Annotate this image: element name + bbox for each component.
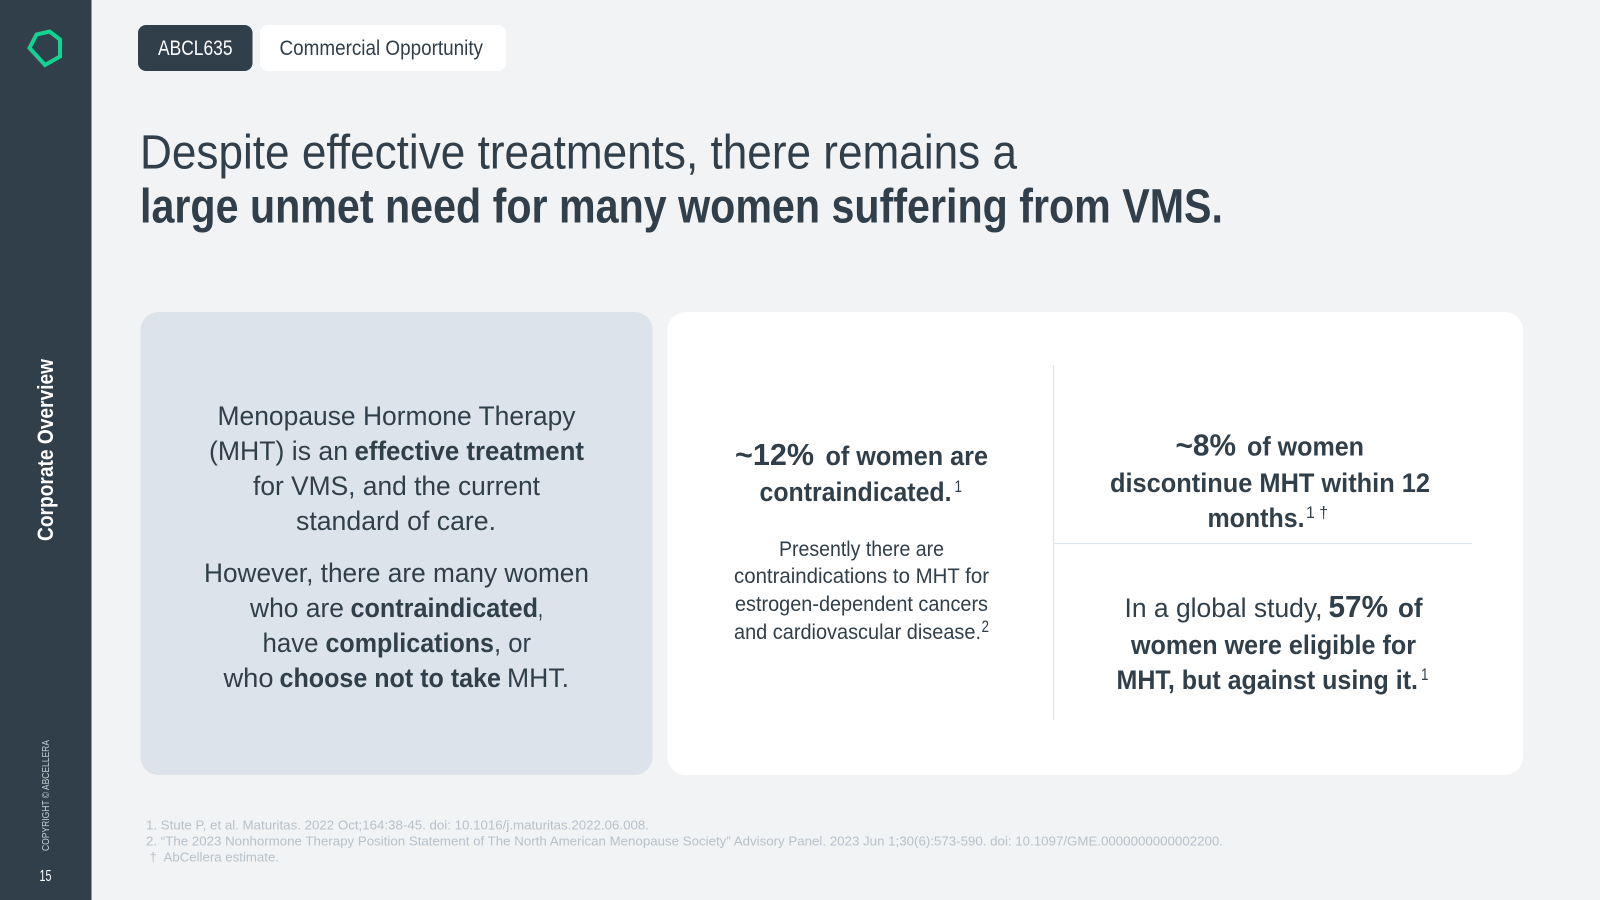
text block: however: However, there are many women — [204, 558, 589, 588]
stat: 57 percent eligible — [1116, 589, 1428, 695]
text block: contraindications detail — [734, 538, 989, 644]
stat: 57 percent eligible: women were eligible for — [1130, 630, 1416, 660]
tag: ABCL635: ABCL635 — [158, 37, 232, 60]
text block: however: contraindicated — [350, 593, 538, 623]
stat: 12 percent contraindicated — [735, 437, 988, 507]
text block: however: have — [262, 628, 318, 658]
stat: 57 percent eligible: 57% — [1328, 589, 1388, 624]
text block: however: complications — [326, 628, 494, 658]
stat: 12 percent contraindicated: ~12% — [735, 437, 814, 472]
panel: MHT summary — [140, 312, 652, 775]
text block: however — [204, 558, 589, 693]
stat: 8 percent discontinue: months. — [1208, 503, 1304, 533]
text block: however: who are — [249, 593, 344, 623]
text block: contraindications detail: and cardiovascular disease. — [734, 621, 981, 644]
stat: 8 percent discontinue — [1110, 428, 1430, 533]
text block: effective treatment — [209, 401, 584, 536]
text block: however: who — [222, 663, 274, 693]
stat: 8 percent discontinue: 1 † — [1306, 503, 1328, 522]
title: large unmet need for many women suffering from VMS. — [140, 180, 1223, 234]
text block: effective treatment: Menopause Hormone Therapy — [218, 401, 576, 431]
text block: however: , — [538, 593, 543, 623]
stat: 8 percent discontinue: of women — [1247, 432, 1364, 462]
text block: effective treatment: for VMS, and the current — [253, 471, 540, 501]
text block: effective treatment: standard of care. — [296, 506, 496, 536]
footnotes: 1. Stute P, et al. Maturitas. 2022 Oct;164:38-45. doi: 10.1016/j.maturitas.2022.06.008. — [146, 818, 649, 832]
stat: 57 percent eligible: of — [1398, 593, 1423, 623]
page number: 15 — [40, 868, 52, 885]
footnotes: † — [150, 850, 157, 864]
footnotes: AbCellera estimate. — [164, 850, 279, 864]
tag: Commercial Opportunity: Commercial Opportunity — [280, 37, 483, 60]
tag: Commercial Opportunity — [260, 25, 506, 71]
text block: effective treatment: (MHT) is an — [209, 436, 348, 466]
text block: contraindications detail: contraindications to MHT for — [734, 565, 989, 588]
copyright: COPYRIGHT © ABCELLERA — [40, 740, 52, 851]
text block: however: choose not to take — [280, 663, 501, 693]
sidebar — [0, 0, 92, 900]
icon: logo hexagon — [30, 32, 60, 65]
stat: 8 percent discontinue: discontinue MHT within 12 — [1110, 468, 1430, 498]
stat: 12 percent contraindicated: contraindicated. — [760, 477, 952, 507]
stat: 12 percent contraindicated: of women are — [826, 441, 988, 471]
text block: contraindications detail: 2 — [982, 617, 989, 636]
footnotes: 2. “The 2023 Nonhormone Therapy Position Statement of The North American Menopause Society” Advisory Panel. 2023 Jun 1;30(6):573-590. doi: 10.1097/GME.0000000000002200. — [146, 834, 1223, 848]
text block: however: , or — [494, 628, 531, 658]
text block: however: MHT. — [507, 663, 569, 693]
title: Despite effective treatments, there remains a — [140, 126, 1017, 180]
section label: Corporate Overview — [33, 358, 58, 541]
stat: 57 percent eligible: 1 — [1421, 665, 1428, 684]
text block: effective treatment: effective treatment — [354, 436, 584, 466]
stat: 8 percent discontinue: ~8% — [1176, 428, 1236, 462]
panel: statistics — [668, 312, 1523, 775]
text block: contraindications detail: Presently there are — [779, 538, 944, 561]
footnotes — [146, 818, 1223, 864]
stat: 57 percent eligible: MHT, but against using it. — [1116, 665, 1418, 695]
title — [140, 126, 1223, 234]
stat: 57 percent eligible: In a global study, — [1124, 593, 1322, 623]
tag: ABCL635 — [138, 25, 252, 71]
stat: 12 percent contraindicated: 1 — [954, 477, 962, 496]
text block: contraindications detail: estrogen-dependent cancers — [735, 593, 988, 616]
